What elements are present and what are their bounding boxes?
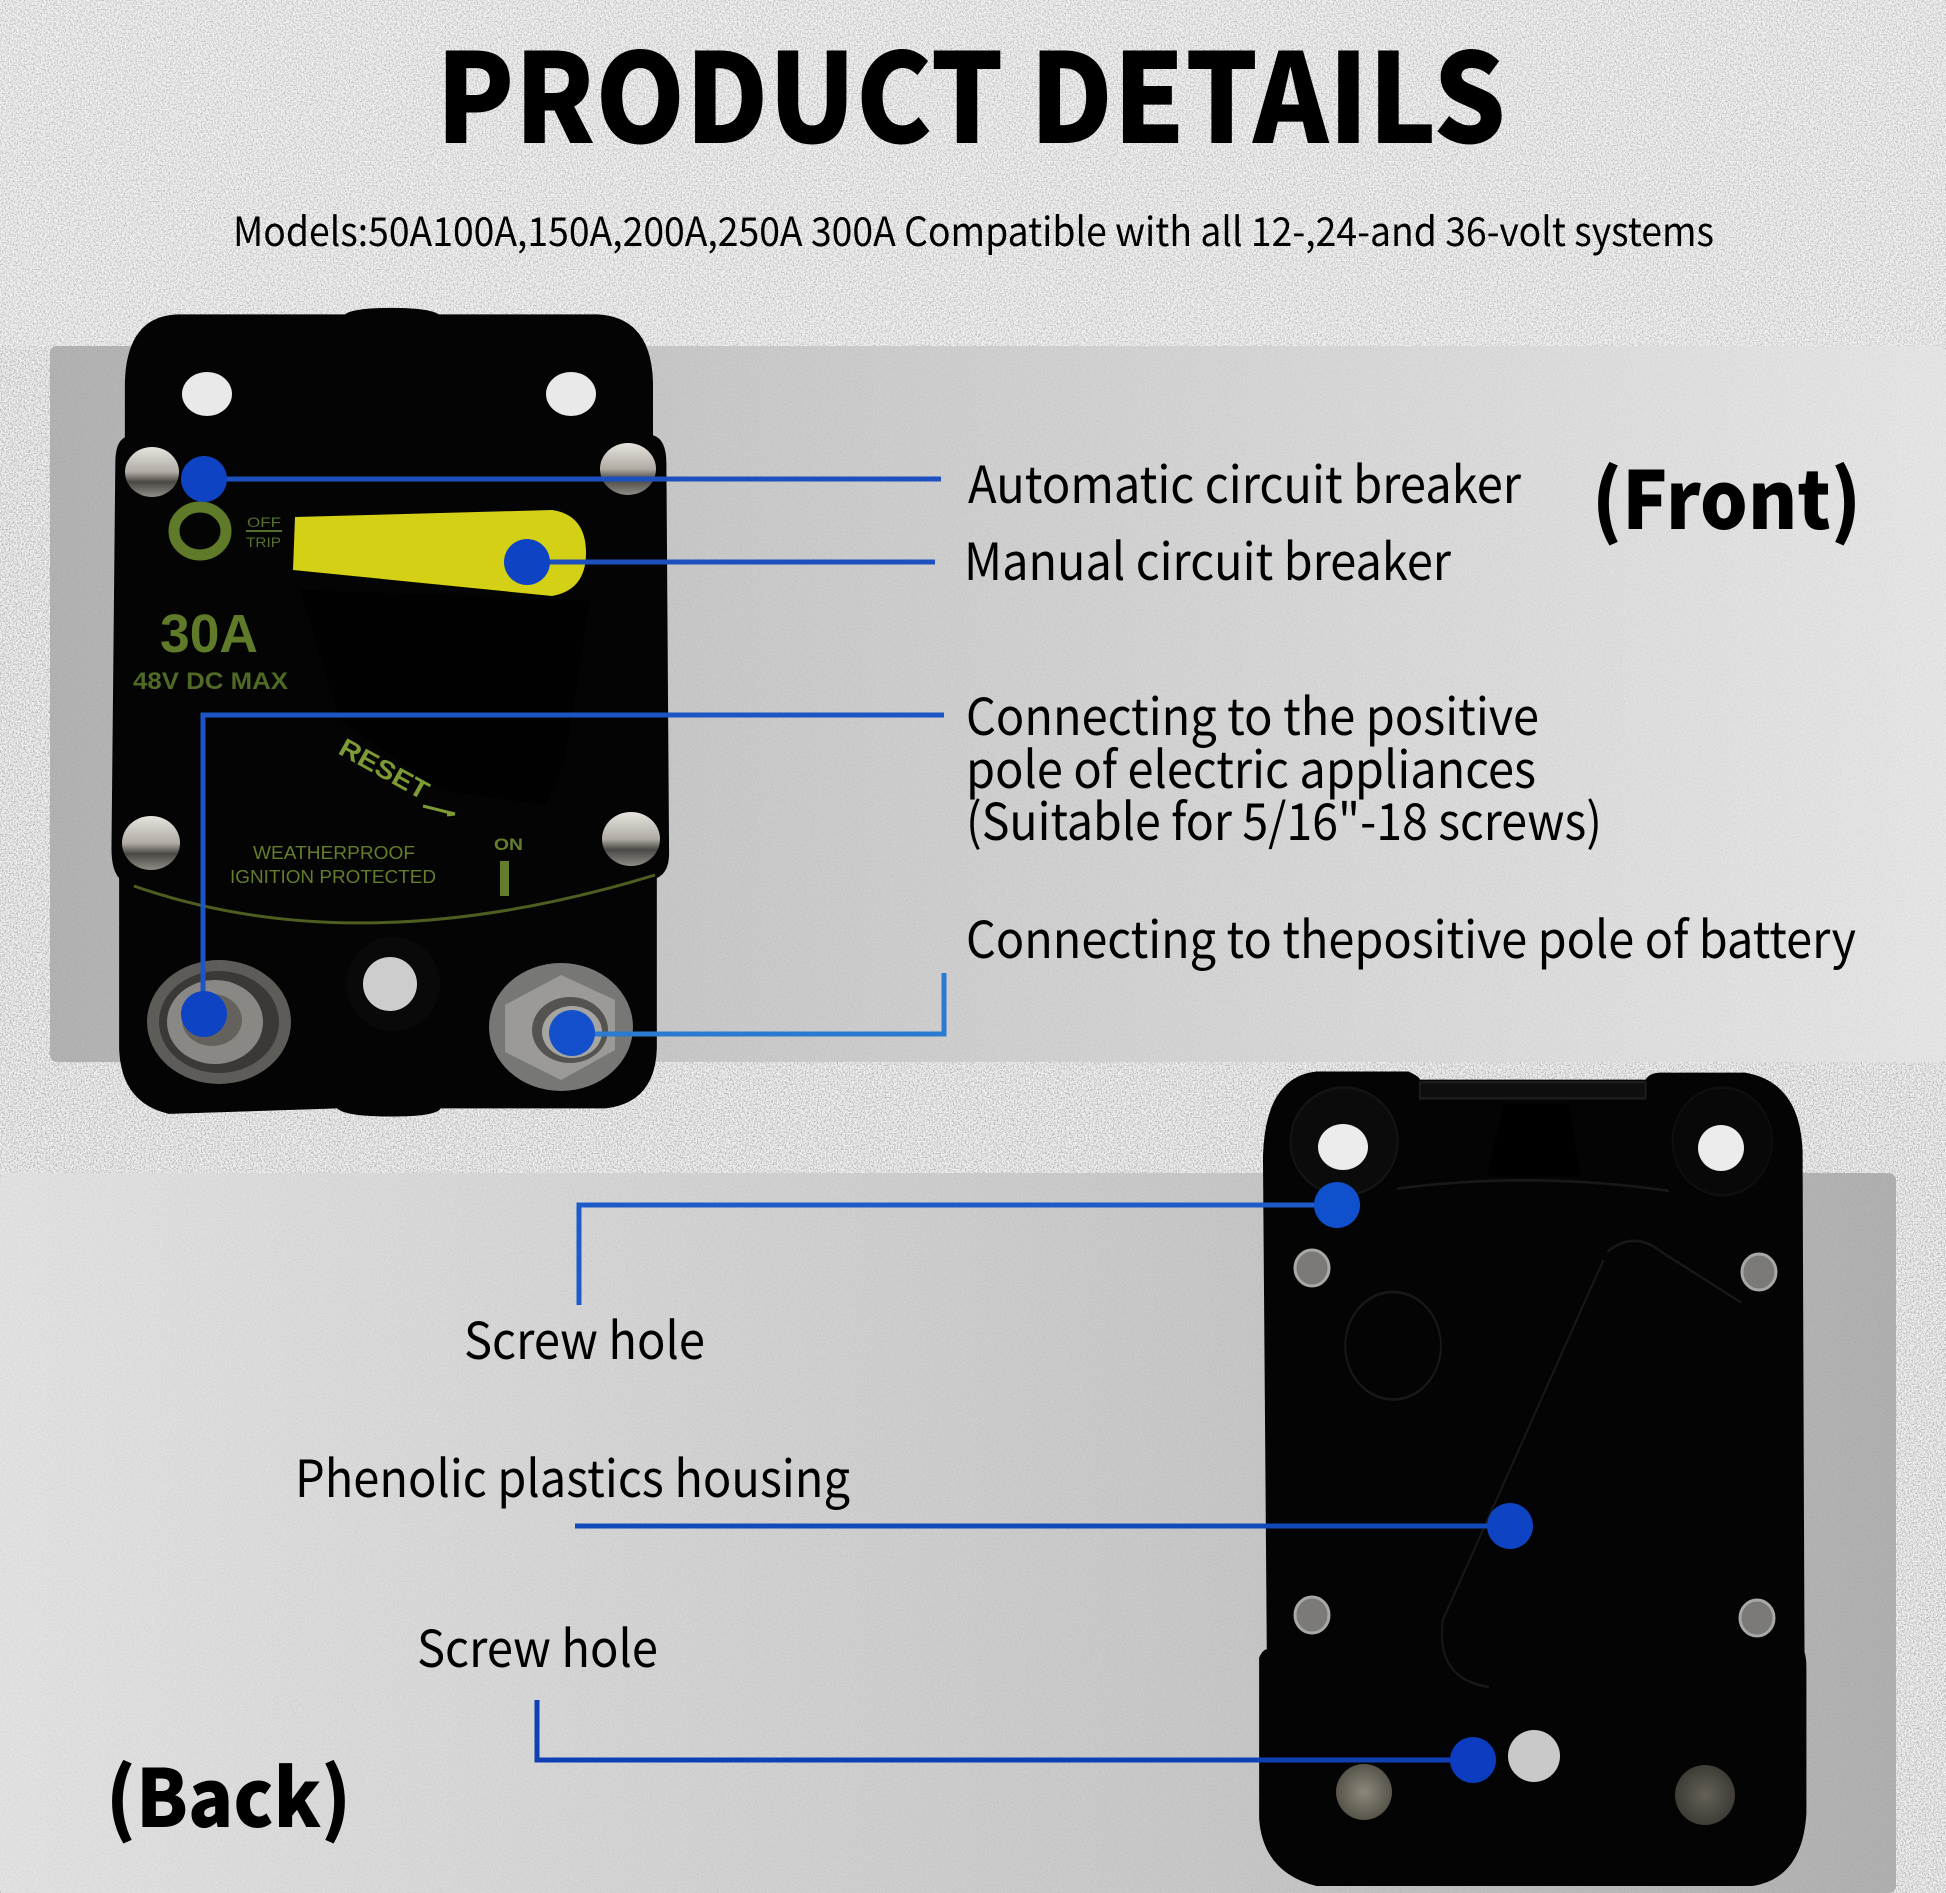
reset label: RESET bbox=[334, 732, 434, 806]
hole bottom center bbox=[1508, 1730, 1560, 1782]
callout: lower screw hole: Screw hole bbox=[417, 1608, 658, 1682]
product: back of breaker bbox=[1259, 1072, 1806, 1886]
callout: positive pole of battery bbox=[549, 899, 1856, 1056]
hole top left bbox=[1318, 1124, 1368, 1170]
callout: manual circuit breaker: Manual circuit breaker bbox=[964, 521, 1451, 595]
callout: lower screw hole bbox=[417, 1608, 1496, 1783]
product: front of breaker bbox=[111, 308, 669, 1117]
screw upper right bbox=[1742, 1254, 1776, 1290]
rivet left bbox=[1336, 1764, 1392, 1820]
reset label bbox=[334, 732, 455, 815]
callout: positive pole of appliances: (Suitable for 5/16"-18 screws) bbox=[966, 781, 1602, 855]
callout: positive pole of appliances: Connecting to the positive bbox=[966, 676, 1539, 750]
label: front: (Front) bbox=[1592, 437, 1861, 553]
off trip label: OFF bbox=[247, 514, 281, 530]
back body bbox=[1259, 1072, 1806, 1886]
rating 30A: 30A bbox=[160, 604, 258, 664]
mounting hole center bbox=[346, 937, 440, 1031]
off trip label: TRIP bbox=[246, 534, 281, 550]
callout: upper screw hole: Screw hole bbox=[464, 1300, 705, 1374]
screw upper left bbox=[1295, 1250, 1329, 1286]
callout: positive pole of battery: Connecting to thepositive pole of battery bbox=[966, 899, 1856, 973]
rivet right bbox=[1675, 1765, 1735, 1825]
screw lower right bbox=[1740, 1600, 1774, 1636]
panel: front band bbox=[50, 346, 1946, 1062]
mounting hole top right bbox=[546, 372, 596, 416]
label: back: (Back) bbox=[106, 1735, 351, 1851]
panel: back band bbox=[0, 1173, 1896, 1893]
weatherproof text: IGNITION PROTECTED bbox=[230, 867, 436, 887]
raised molding bbox=[1291, 1082, 1772, 1687]
off trip label bbox=[246, 514, 282, 550]
screw top left bbox=[125, 447, 179, 497]
mounting hole top left bbox=[182, 372, 232, 416]
on marker: ON bbox=[494, 835, 523, 854]
screw bottom right bbox=[602, 812, 660, 866]
weatherproof text: WEATHERPROOF bbox=[253, 843, 415, 863]
callout: phenolic plastics housing: Phenolic plastics housing bbox=[295, 1438, 850, 1512]
subtitle: models: Models:50A100A,150A,200A,250A 300A Compatible with all 12-,24-and 36-volt systems bbox=[233, 200, 1714, 258]
yellow handle bbox=[293, 510, 586, 596]
terminal left bbox=[147, 960, 291, 1084]
screw lower left bbox=[1295, 1597, 1329, 1633]
callout: positive pole of appliances: pole of electric appliances bbox=[966, 729, 1536, 803]
callout: upper screw hole bbox=[464, 1182, 1360, 1374]
screw top right bbox=[600, 443, 656, 495]
callout: automatic circuit breaker: Automatic circuit breaker bbox=[968, 444, 1521, 518]
handle cover bbox=[300, 590, 590, 805]
weatherproof text bbox=[230, 843, 436, 887]
screw bottom left bbox=[122, 816, 180, 870]
callout: positive pole of appliances bbox=[181, 676, 1602, 1037]
status ring bbox=[174, 507, 226, 555]
on marker bbox=[494, 835, 523, 896]
terminal right bbox=[489, 963, 633, 1091]
front body bbox=[111, 308, 669, 1117]
callout: phenolic plastics housing bbox=[295, 1438, 1533, 1549]
title: PRODUCT DETAILS bbox=[436, 0, 1506, 179]
callout: automatic circuit breaker bbox=[181, 444, 1521, 518]
voltage rating: 48V DC MAX bbox=[133, 668, 288, 695]
callout: manual circuit breaker bbox=[504, 521, 1451, 595]
hole top right bbox=[1698, 1125, 1744, 1171]
